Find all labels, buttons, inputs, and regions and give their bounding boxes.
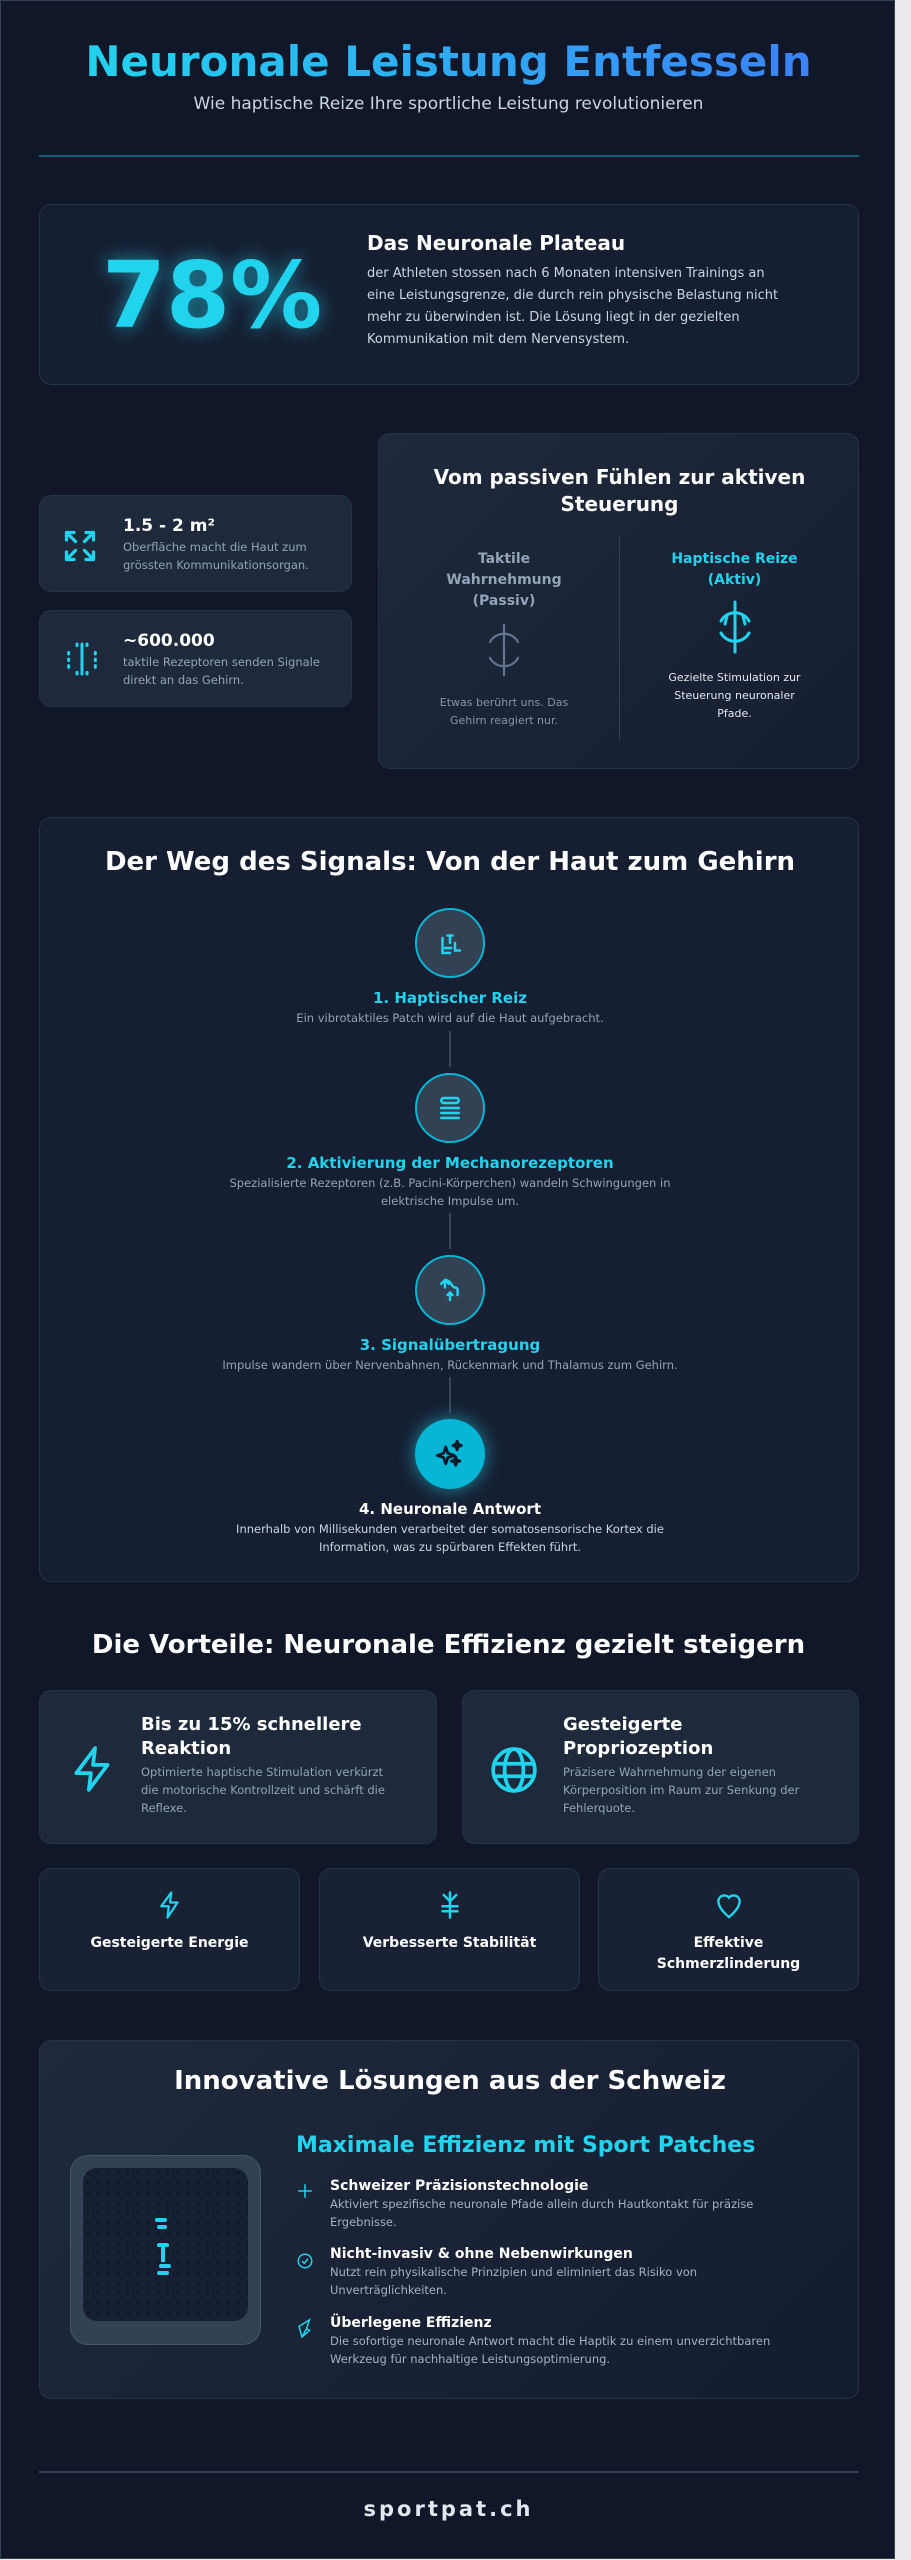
icon: step 2 (415, 1073, 485, 1143)
step 4: Innerhalb von Millisekunden verarbeitet der somatosensorische Kortex die (236, 1522, 664, 1536)
column: active: Gezielte Stimulation zur Steuerung neuronaler Pfade. (668, 671, 801, 720)
panel: pain relief: Schmerzlinderung (657, 1956, 800, 1972)
text: proprioception: Gesteigerte (563, 1714, 682, 1735)
step 2: elektrische Impulse um. (381, 1194, 519, 1208)
step 4 (236, 1408, 664, 1554)
panel: energy (39, 1868, 300, 1991)
column: passive: Etwas berührt uns. Das Gehirn reagiert nur. (440, 696, 568, 727)
heading: sport patches: Maximale Effizienz mit Sport Patches (296, 2133, 755, 2158)
panel: pain relief: Effektive (694, 1935, 763, 1951)
icon: lightning (74, 1746, 110, 1792)
item: swiss precision (298, 2178, 753, 2229)
text: skin area: 1.5 - 2 m² (123, 516, 215, 536)
icon: receptors (67, 642, 97, 676)
text: skin area (123, 516, 309, 572)
step 3: 3. Signalübertragung (360, 1336, 540, 1354)
text: receptors: ~600.000 (123, 631, 215, 651)
heading: benefits: Die Vorteile: Neuronale Effizienz gezielt steigern (92, 1630, 805, 1660)
icon: expand (64, 530, 96, 562)
panel: signal path (39, 817, 859, 1582)
column: passive: Taktile (478, 551, 530, 567)
item: efficiency (298, 2314, 770, 2366)
stat: 78%: 78% (102, 242, 322, 349)
step 2: Spezialisierte Rezeptoren (z.B. Pacini-Körperchen) wandeln Schwingungen in (229, 1176, 670, 1190)
step 1: Ein vibrotaktiles Patch wird auf die Haut aufgebracht. (296, 1011, 604, 1025)
step 3 (222, 1255, 678, 1372)
text: proprioception (563, 1714, 800, 1815)
item: swiss precision: Aktiviert spezifische neuronale Pfade allein durch Hautkontakt für präzise Ergebnisse. (330, 2197, 753, 2229)
text: receptors (123, 631, 320, 687)
item: non-invasive: Nutzt rein physikalische Prinzipien und eliminiert das Risiko von Unverträglichkeiten. (330, 2265, 697, 2297)
panel: energy: Gesteigerte Energie (90, 1935, 249, 1951)
icon: active haptics (719, 600, 751, 654)
column: active: Haptische Reize (671, 551, 798, 567)
footer: website: sportpat.ch (364, 2497, 533, 2521)
title: Neuronale Leistung Entfesseln (85, 37, 812, 86)
subtitle: Wie haptische Reize Ihre sportliche Leistung revolutionieren (194, 94, 703, 114)
panel: swiss solutions (39, 2040, 859, 2399)
text: skin area: Oberfläche macht die Haut zum grössten Kommunikationsorgan. (123, 540, 309, 572)
image: sport patch (70, 2155, 261, 2345)
item: non-invasive: Nicht-invasiv & ohne Nebenwirkungen (330, 2246, 633, 2262)
text: faster reaction (141, 1714, 385, 1815)
icon: passive touch (488, 624, 520, 676)
column: passive (440, 551, 568, 727)
step 4: 4. Neuronale Antwort (359, 1500, 541, 1518)
text: faster reaction: Bis zu 15% schnellere Reaktion (141, 1714, 362, 1759)
panel: passive vs active (378, 433, 859, 769)
step 2: 2. Aktivierung der Mechanorezeptoren (286, 1154, 614, 1172)
icon: step 1 (415, 908, 485, 978)
heading: plateau: Das Neuronale Plateau (367, 231, 625, 255)
text: proprioception: Propriozeption (563, 1738, 713, 1759)
column: active (668, 551, 801, 720)
text: proprioception: Präzisere Wahrnehmung der eigenen Körperposition im Raum zur Senkung der Fehlerquote. (563, 1765, 799, 1815)
text: plateau description: der Athleten stossen nach 6 Monaten intensiven Trainings an eine Leistungsgrenze, die durch rein physische Belastung nicht mehr zu überwinden ist. Die Lösung liegt in der gezielten Kommunikation mit dem Nervensystem. (367, 266, 778, 347)
icon: step 3 (415, 1255, 485, 1325)
panel: stability (319, 1868, 580, 1991)
step 1: 1. Haptischer Reiz (373, 989, 527, 1007)
heading: passive to active: Steuerung (560, 492, 678, 516)
icon: step 4 (415, 1419, 485, 1489)
item: efficiency: Überlegene Effizienz (330, 2315, 492, 2331)
item: efficiency: Die sofortige neuronale Antwort macht die Haptik zu einem unverzichtbaren Werkzeug für nachhaltige Leistungsoptimierung. (330, 2334, 770, 2366)
panel: faster reaction (39, 1690, 437, 1844)
icon: globe (491, 1747, 537, 1793)
icon: energy (160, 1891, 179, 1919)
panel: pain relief (598, 1868, 859, 1991)
column: active: (Aktiv) (708, 572, 761, 588)
heading: swiss solutions: Innovative Lösungen aus der Schweiz (174, 2066, 726, 2096)
panel: stat skin area (39, 495, 352, 592)
column: passive: Wahrnehmung (446, 572, 562, 588)
icon: stability (441, 1891, 459, 1919)
item: swiss precision: Schweizer Präzisionstechnologie (330, 2178, 588, 2194)
heading: passive to active: Vom passiven Fühlen zur aktiven (434, 465, 805, 489)
heading: signal path: Der Weg des Signals: Von der Haut zum Gehirn (105, 847, 795, 877)
column: passive: (Passiv) (473, 593, 535, 609)
panel: stability: Verbesserte Stabilität (363, 1935, 536, 1951)
item: non-invasive (298, 2246, 697, 2297)
text: faster reaction: Optimierte haptische Stimulation verkürzt die motorische Kontrollzeit und schärft die Reflexe. (141, 1765, 385, 1815)
icon: heart (717, 1894, 741, 1918)
heading: passive to active (434, 465, 805, 516)
panel: proprioception (462, 1690, 859, 1844)
step 1 (296, 908, 604, 1025)
panel: neural plateau (39, 204, 859, 385)
step 2 (229, 1073, 670, 1208)
panel: stat receptors (39, 610, 352, 707)
text: receptors: taktile Rezeptoren senden Signale direkt an das Gehirn. (123, 655, 320, 687)
step 4: Information, was zu spürbaren Effekten führt. (319, 1540, 581, 1554)
step 3: Impulse wandern über Nervenbahnen, Rückenmark und Thalamus zum Gehirn. (222, 1358, 678, 1372)
